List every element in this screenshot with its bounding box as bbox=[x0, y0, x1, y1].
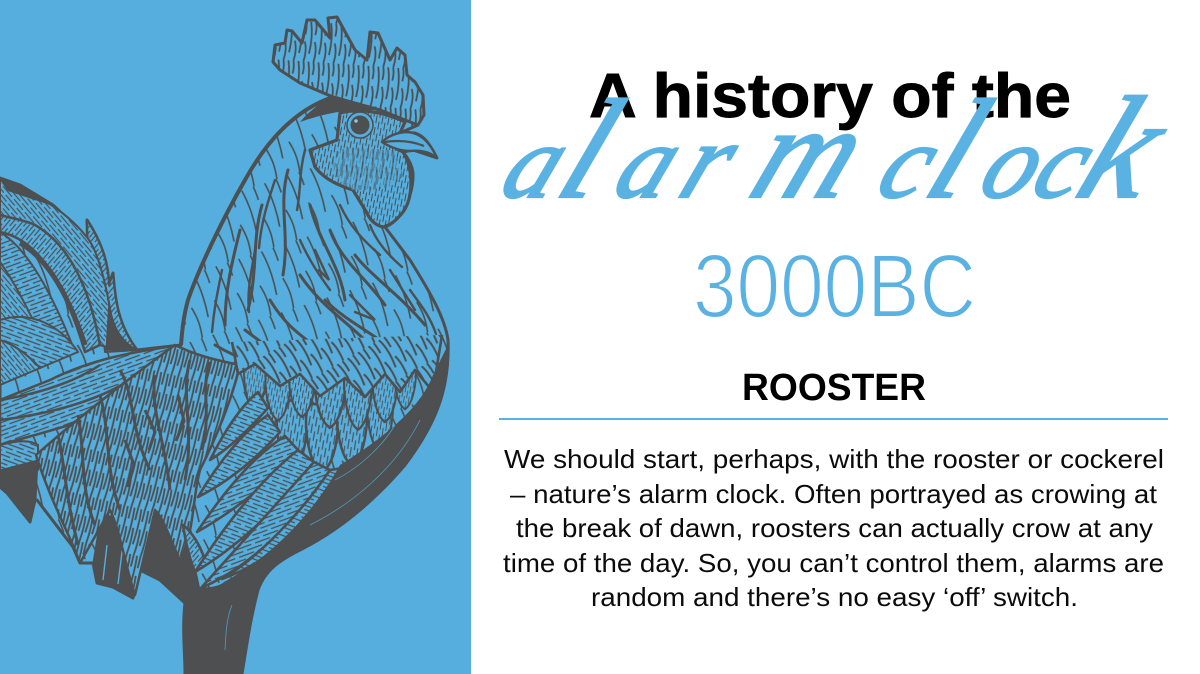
belly highlight lines bbox=[225, 420, 420, 650]
scallop row two bbox=[254, 384, 393, 472]
text block: rooster description: the break of dawn, roosters can actually crow at any bbox=[516, 513, 1153, 543]
script heading: alarm clock: m bbox=[733, 80, 921, 226]
script heading: alarm clock: r bbox=[665, 102, 757, 221]
divider line bbox=[499, 418, 1168, 420]
wing scallops bbox=[244, 355, 416, 472]
script heading: alarm clock: l bbox=[908, 70, 1011, 228]
script heading: alarm clock: o bbox=[966, 106, 1064, 220]
icon: rooster bbox=[0, 17, 448, 674]
text block: rooster description: random and there’s no easy ‘off’ switch. bbox=[591, 582, 1078, 612]
date: 3000BC: 3000BC bbox=[693, 237, 976, 337]
eye bbox=[347, 112, 373, 138]
panel: rooster illustration bbox=[0, 0, 471, 674]
blue panel background bbox=[0, 0, 471, 674]
saddle streamers bbox=[0, 345, 181, 522]
neck and breast hackles bbox=[212, 150, 440, 375]
script heading: alarm clock: c bbox=[864, 106, 956, 220]
text block: rooster description: – nature’s alarm clock. Often portrayed as crowing at bbox=[510, 479, 1158, 509]
shoulder mantle feathers bbox=[232, 335, 442, 397]
script heading: alarm clock: l bbox=[540, 70, 643, 228]
script heading: alarm clock: c bbox=[1019, 106, 1111, 220]
title: A history of the bbox=[589, 62, 1071, 131]
hatched face cheek bbox=[333, 148, 403, 190]
script heading: alarm clock: a bbox=[601, 106, 699, 220]
dark band under comb bbox=[300, 96, 380, 122]
heading: ROOSTER: ROOSTER bbox=[742, 367, 926, 409]
face bbox=[310, 111, 411, 227]
lower hackle feathers bbox=[36, 345, 240, 603]
text block: rooster description: time of the day. So, you can’t control them, alarms are bbox=[503, 548, 1164, 578]
mantle fill bbox=[232, 335, 442, 397]
script heading: alarm clock: a bbox=[488, 106, 586, 220]
mantle feather edge bbox=[232, 335, 442, 397]
beak bbox=[382, 132, 437, 158]
head and face bbox=[310, 111, 437, 227]
text block: rooster description bbox=[503, 444, 1164, 612]
scallop row one bbox=[244, 355, 416, 430]
script heading: alarm clock: k bbox=[1059, 67, 1192, 229]
dark belly and leg bbox=[155, 345, 448, 674]
wing primary feathers bbox=[183, 392, 343, 588]
text block: rooster description: We should start, perhaps, with the rooster or cockerel bbox=[504, 444, 1164, 474]
tail feathers bbox=[0, 178, 137, 385]
outer neck contour bbox=[181, 97, 333, 345]
comb bbox=[273, 17, 424, 125]
rooster silhouette bbox=[0, 97, 448, 674]
